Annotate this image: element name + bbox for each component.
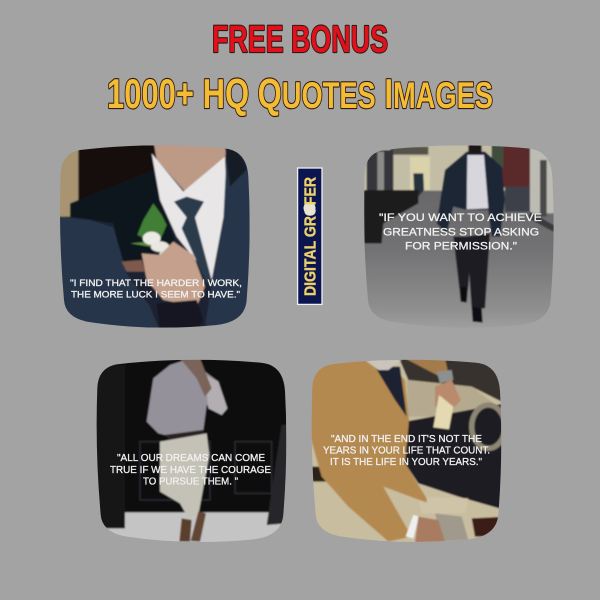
title: free bonus: FREE BONUS xyxy=(212,19,388,61)
quote text 2: GREATNESS STOP ASKING xyxy=(383,226,539,238)
quote text 2: "IF YOU WANT TO ACHIEVE xyxy=(379,212,543,224)
quote text 1: THE MORE LUCK I SEEM TO HAVE." xyxy=(71,290,240,300)
logo badge: digital grofer xyxy=(298,168,322,304)
panel: walking man quote xyxy=(364,146,554,324)
quote text 2 xyxy=(379,212,543,252)
quote text 3: TO PURSUE THEM. " xyxy=(143,476,238,488)
quote text 1 xyxy=(70,278,242,300)
quote text 3: "ALL OUR DREAMS CAN COME xyxy=(117,453,265,464)
quote text 4: YEARS IN YOUR LIFE THAT COUNT. xyxy=(323,446,490,456)
quote text 3: TRUE IF WE HAVE THE COURAGE xyxy=(110,465,271,476)
quote text 4 xyxy=(323,434,490,468)
quote text 4: "AND IN THE END IT'S NOT THE xyxy=(331,434,482,445)
panel: black door quote xyxy=(96,360,286,542)
quote text 2: FOR PERMISSION." xyxy=(405,240,517,252)
quote text 3 xyxy=(110,453,271,488)
panel: car interior quote xyxy=(312,360,502,542)
quote text 1: "I FIND THAT THE HARDER I WORK, xyxy=(70,278,242,288)
subtitle: quotes images: 1000+ HQ QUOTES IMAGES xyxy=(107,70,493,117)
logo badge: digital grofer: DIGITAL GROFER xyxy=(302,177,320,296)
panel: buttonhole flower quote xyxy=(60,146,250,328)
quote text 4: IT IS THE LIFE IN YOUR YEARS." xyxy=(330,457,482,468)
